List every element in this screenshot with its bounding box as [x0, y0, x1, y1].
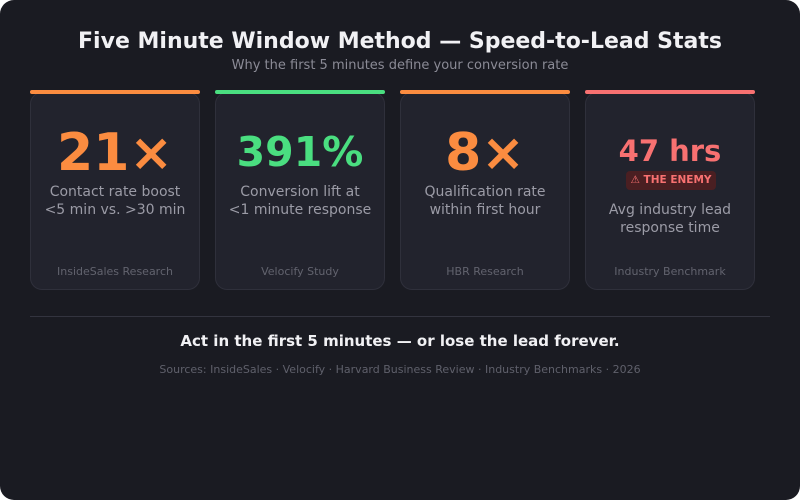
accent bar green [215, 90, 385, 94]
panel: 21x: 21× [57, 123, 173, 183]
panel: 21x: InsideSales Research [57, 265, 173, 278]
panel: 8x: HBR Research [446, 265, 524, 278]
badge: the enemy [626, 171, 716, 190]
tagline: Act in the first 5 minutes — or lose the lead forever. [180, 332, 620, 350]
sources: Sources: InsideSales · Velocify · Harvard Business Review · Industry Benchmarks · 2026 [159, 363, 641, 376]
panel: 47 hrs: response time [620, 220, 720, 236]
accent bar red [585, 90, 755, 94]
accent bar orange [400, 90, 570, 94]
panel: 8x [400, 92, 570, 290]
panel: 8x: within first hour [430, 202, 540, 218]
panel: 391%: <1 minute response [229, 202, 371, 218]
panel: 8x: 8× [445, 123, 525, 183]
panel: 47 hrs: Avg industry lead [609, 202, 731, 218]
panel: 21x: <5 min vs. >30 min [45, 202, 185, 218]
panel: 391%: Conversion lift at [240, 184, 360, 200]
badge: the enemy: ⚠ THE ENEMY [630, 174, 712, 186]
panel: 391%: Velocify Study [261, 265, 339, 278]
panel: 8x: Qualification rate [424, 184, 546, 200]
panel: 21x [30, 92, 200, 290]
title: Five Minute Window Method — Speed-to-Lead Stats [78, 29, 722, 54]
subtitle: Why the first 5 minutes define your conversion rate [232, 58, 568, 73]
panel: 47 hrs [585, 92, 755, 290]
panel: 391%: 391% [237, 128, 363, 176]
panel: 47 hrs: 47 hrs [619, 134, 721, 168]
accent bar orange [30, 90, 200, 94]
panel: 47 hrs: Industry Benchmark [614, 265, 726, 278]
panel: 21x: Contact rate boost [50, 184, 180, 200]
panel: 391% [215, 92, 385, 290]
